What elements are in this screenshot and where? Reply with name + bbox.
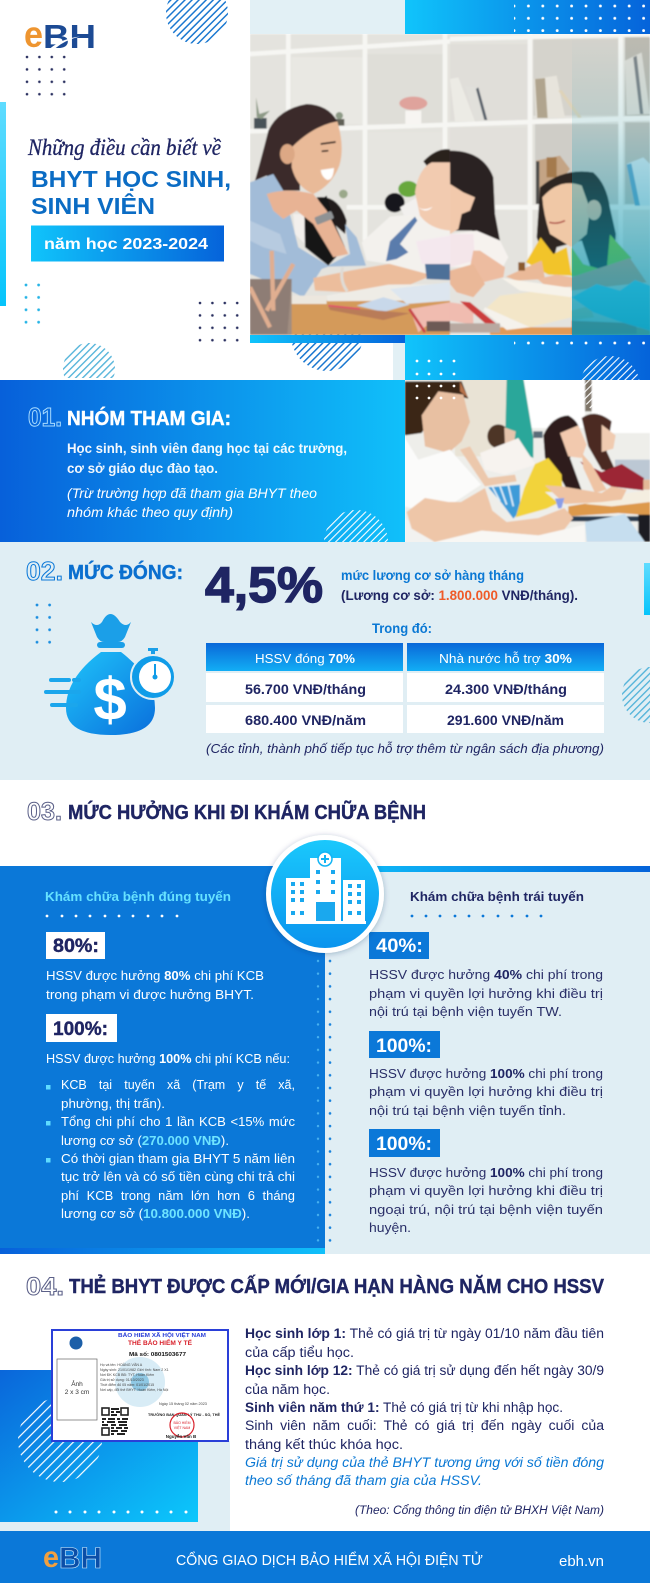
stat: 4,5%: 4,5%	[205, 557, 323, 613]
heading: 03: 03.	[27, 798, 62, 826]
text: thời hạn thẻ: Học sinh lớp 12: Thẻ có giá trị sử dụng đến hết ngày 30/9	[245, 1363, 604, 1378]
footer: CỔNG GIAO DỊCH BẢO HIỂM XÃ HỘI ĐIỆN TỬ	[176, 1551, 483, 1569]
title: năm học 2023-2024	[44, 236, 208, 253]
heading: 04: 04.	[26, 1273, 64, 1301]
icon: eBH logo: e	[24, 14, 43, 55]
heading: 02	[26, 556, 183, 586]
health insurance card: THẺ BẢO HIỂM Y TẾ	[128, 1337, 193, 1347]
heading: 01: 01.	[28, 402, 62, 432]
column: khám chữa bệnh trái tuyến: Khám chữa bệnh trái tuyến	[410, 889, 584, 904]
health insurance card: VIỆT NAM	[174, 1425, 190, 1430]
column: khám chữa bệnh trái tuyến: huyện.	[369, 1220, 411, 1235]
table: contribution split: 680.400 VNĐ/năm	[245, 713, 366, 728]
text: thời hạn thẻ: Học sinh lớp 1: Thẻ có giá trị từ ngày 01/10 năm đầu tiên	[245, 1326, 604, 1341]
badge: 80%	[46, 932, 105, 959]
health insurance card: 2 x 3 cm	[65, 1389, 89, 1396]
icon: money bag with stopwatch	[44, 614, 175, 735]
title: SINH VIÊN	[31, 192, 155, 219]
badge: 100%	[46, 1014, 117, 1042]
table: contribution split: Nhà nước hỗ trợ 30%	[439, 651, 572, 666]
text: thời hạn thẻ: tháng kết thúc khóa học.	[245, 1437, 403, 1452]
column: khám chữa bệnh đúng tuyến: HSSV được hưởng 100% chi phí KCB nếu:	[46, 1051, 290, 1066]
column: khám chữa bệnh trái tuyến: HSSV được hưởng 40% chi phí trong	[369, 967, 603, 982]
column: khám chữa bệnh trái tuyến	[369, 889, 603, 1235]
health insurance card: Nơi ĐK KCB BĐ: TYT, Hoàn Kiếm	[100, 1373, 154, 1377]
column: khám chữa bệnh trái tuyến: phạm vi quyền lợi hưởng khi điều trị	[369, 1183, 603, 1198]
badge: 100% tỉnh: 100%:	[376, 1036, 432, 1057]
note: local budget: (Các tỉnh, thành phố tiếp tục hỗ trợ thêm từ ngân sách địa phương)	[206, 741, 604, 756]
text: thời hạn thẻ: Sinh viên năm thứ 1: Thẻ có giá trị từ khi nhập học.	[245, 1400, 563, 1415]
table: contribution split: 56.700 VNĐ/tháng	[245, 682, 366, 697]
panel: 04 thẻ BHYT	[0, 1254, 650, 1531]
text: thời hạn thẻ	[245, 1326, 605, 1488]
health insurance card: Nơi cấp, đổi thẻ BHYT: Hoàn Kiếm, Hà Nội	[100, 1388, 168, 1392]
photo: mother and two daughters studying	[250, 34, 650, 335]
text: nhóm tham gia: nhóm khác theo quy định)	[67, 504, 233, 520]
column: khám chữa bệnh trái tuyến: phạm vi quyền lợi hưởng khi điều trị	[369, 1084, 603, 1099]
health insurance card: Thời điểm đủ 05 năm: 01/01/2015	[100, 1383, 154, 1387]
badge: 100% huyện: 100%:	[376, 1134, 432, 1155]
badge: 100%: 100%:	[53, 1019, 108, 1040]
icon: footer eBH logo: e	[43, 1541, 59, 1574]
table: contribution split: 24.300 VNĐ/tháng	[445, 682, 567, 697]
column: khám chữa bệnh đúng tuyến: Khám chữa bệnh đúng tuyến	[45, 889, 231, 904]
health insurance card: TRƯỞNG BAN QUẢN LÝ THU - SỔ, THẺ	[148, 1412, 220, 1417]
text: thời hạn thẻ: theo số tháng đã tham gia của HSSV.	[245, 1473, 482, 1488]
title	[27, 135, 231, 262]
column: khám chữa bệnh trái tuyến: phạm vi quyền lợi hưởng khi điều trị	[369, 986, 603, 1001]
column: khám chữa bệnh trái tuyến: ngoại trú, nội trú tại bệnh viện tuyến	[369, 1202, 603, 1217]
heading: 02: 02.	[26, 556, 63, 586]
heading: 01: NHÓM THAM GIA:	[67, 406, 231, 430]
column: khám chữa bệnh trái tuyến: HSSV được hưởng 100% chi phí trong	[369, 1066, 603, 1081]
list: conditions: phường, thị trấn).	[61, 1096, 165, 1111]
text: nhóm tham gia: Học sinh, sinh viên đang học tại các trường,	[67, 440, 347, 456]
source note: (Theo: Cổng thông tin điện tử BHXH Việt Nam)	[355, 1505, 604, 1517]
column: khám chữa bệnh đúng tuyến	[45, 889, 295, 1221]
title: BHYT HỌC SINH,	[31, 166, 231, 192]
text: mức lương cơ sở: mức lương cơ sở hàng tháng	[341, 568, 524, 583]
list: conditions: Tổng chi phí cho 1 lần KCB <15% mức	[61, 1114, 295, 1129]
badge: 80%: 80%:	[53, 936, 99, 957]
heading: 03	[27, 798, 426, 826]
badge: 40%	[369, 932, 429, 959]
list: conditions: lương cơ sở (270.000 VNĐ).	[61, 1133, 229, 1148]
column: khám chữa bệnh đúng tuyến: HSSV được hưởng 80% chi phí KCB	[46, 968, 264, 983]
text: nhóm tham gia: cơ sở giáo dục đào tạo.	[67, 460, 218, 476]
list: conditions: Có thời gian tham gia BHYT 5 năm liên	[61, 1151, 295, 1166]
icon: eBH logo: BH	[43, 18, 96, 55]
panel: 03 mức hưởng	[0, 780, 650, 1254]
text: thời hạn thẻ: Sinh viên năm cuối: Thẻ có giá trị đến ngày cuối của	[245, 1418, 604, 1433]
table: contribution split: 291.600 VNĐ/năm	[447, 713, 564, 728]
health insurance card	[52, 1330, 228, 1441]
column: khám chữa bệnh trái tuyến: HSSV được hưởng 100% chi phí trong	[369, 1165, 603, 1180]
text: thời hạn thẻ: Giá trị sử dụng của thẻ BHYT tương ứng với số tiền đóng	[245, 1455, 605, 1470]
text: nhóm tham gia: (Trừ trường hợp đã tham gia BHYT theo	[67, 485, 317, 501]
text: thời hạn thẻ: của năm học.	[245, 1382, 330, 1397]
heading: 01	[28, 402, 231, 432]
health insurance card: Giá trị sử dụng: 01/10/2023	[100, 1378, 144, 1382]
text: mức lương cơ sở: (Lương cơ sở: 1.800.000 VNĐ/tháng).	[341, 588, 578, 603]
icon: money bag with stopwatch: $	[93, 666, 127, 733]
health insurance card: Ảnh	[71, 1379, 83, 1388]
heading: 03: MỨC HƯỞNG KHI ĐI KHÁM CHỮA BỆNH	[68, 800, 426, 824]
badge: 100% huyện	[369, 1129, 440, 1157]
column: khám chữa bệnh trái tuyến: nội trú tại bệnh viện tuyến TW.	[369, 1004, 562, 1019]
text: mức lương cơ sở	[341, 568, 578, 603]
health insurance card: BẢO HIỂM	[173, 1420, 191, 1425]
text: nhóm tham gia	[67, 440, 347, 520]
heading: 04: THẺ BHYT ĐƯỢC CẤP MỚI/GIA HẠN HÀNG NĂM CHO HSSV	[69, 1274, 605, 1298]
health insurance card: Ngày sinh: 21/01/1982 Giới tính: Nam 2 X1	[100, 1368, 169, 1372]
icon: footer eBH logo: BH	[59, 1542, 102, 1575]
badge: 40%: 40%:	[376, 936, 423, 957]
QR code	[101, 1407, 129, 1436]
panel: 01 nhóm tham gia	[0, 356, 650, 544]
table: contribution split: HSSV đóng 70%	[255, 651, 355, 666]
heading: 04	[26, 1273, 605, 1301]
panel: hero header	[0, 0, 650, 395]
icon: hospital	[266, 835, 384, 953]
photo: students in a classroom	[405, 378, 650, 544]
table: contribution split	[206, 643, 604, 733]
list: conditions: tục trở lên và có số tiền cùng chi trả chi	[61, 1169, 295, 1184]
health insurance card: Nguyễn Văn B	[166, 1433, 197, 1439]
column: khám chữa bệnh đúng tuyến: trong phạm vi được hưởng BHYT.	[46, 987, 254, 1002]
footer	[0, 1531, 650, 1583]
health insurance card: Ngày 15 tháng 02 năm 2023	[159, 1402, 207, 1406]
heading: 02: MỨC ĐÓNG:	[68, 560, 183, 584]
health insurance card: Họ và tên: HOÀNG VĂN A	[100, 1363, 143, 1367]
badge: 100% tỉnh	[369, 1031, 440, 1058]
list: conditions: phí KCB trong năm lớn hơn 6 tháng	[61, 1188, 295, 1203]
heading: trong đó: Trong đó:	[372, 621, 432, 636]
text: thời hạn thẻ: của cấp tiểu học.	[245, 1345, 354, 1360]
column: khám chữa bệnh trái tuyến: nội trú tại bệnh viện tuyến tỉnh.	[369, 1103, 566, 1118]
health insurance card: BẢO HIỂM XÃ HỘI VIỆT NAM	[118, 1331, 206, 1339]
list: conditions	[46, 1077, 295, 1221]
title: Những điều cần biết về	[27, 135, 222, 160]
footer: ebh.vn	[559, 1553, 604, 1570]
panel: 02 mức đóng	[0, 542, 650, 780]
health insurance card: Mã số: 0801503677	[129, 1351, 186, 1358]
list: conditions: KCB tại tuyến xã (Trạm y tế xã,	[61, 1077, 295, 1092]
icon: eBH logo	[24, 14, 96, 55]
list: conditions: lương cơ sở (10.800.000 VNĐ).	[61, 1206, 250, 1221]
